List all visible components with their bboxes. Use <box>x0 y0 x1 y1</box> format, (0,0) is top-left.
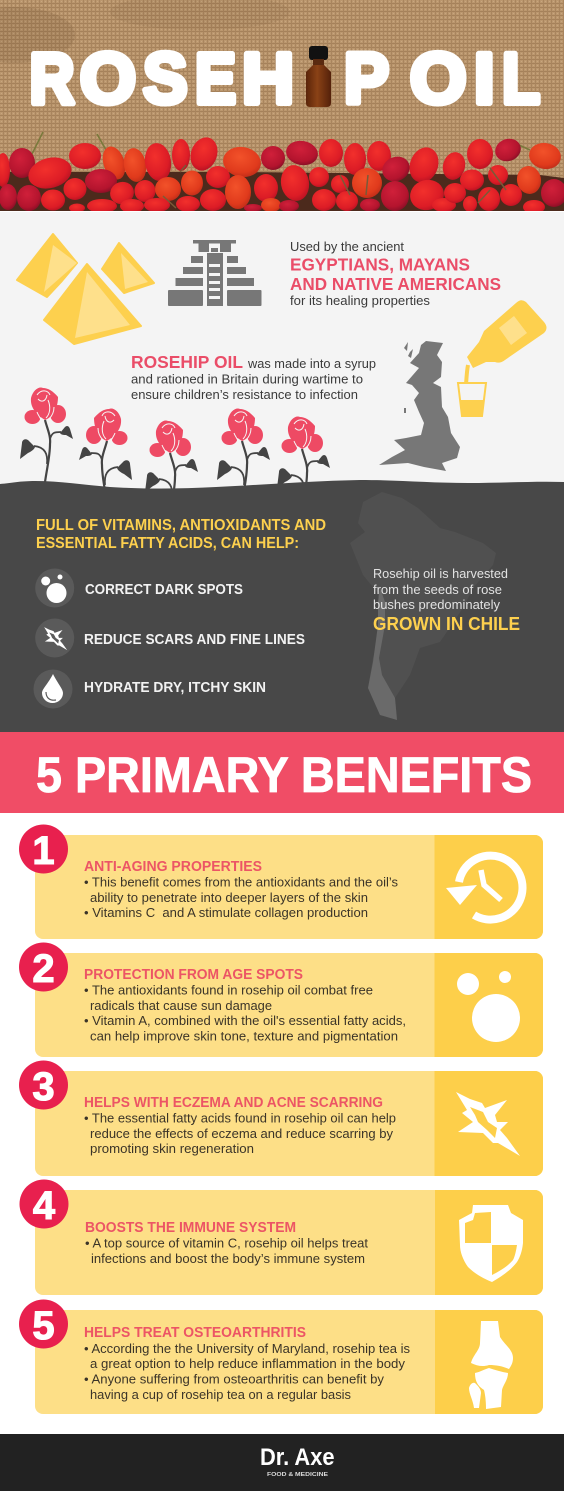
title: ROSEHIP OIL: H <box>242 40 294 119</box>
text block: grown in Chile <box>373 566 520 634</box>
text block: ancient cultures: EGYPTIANS, MAYANS <box>290 254 470 274</box>
rose 1 <box>20 387 73 482</box>
number badge 4 <box>20 1180 68 1228</box>
number badge 3 <box>19 1060 68 1110</box>
card 1 text: ability to penetrate into deeper layers of the skin <box>90 890 368 905</box>
rose 4 <box>217 408 270 503</box>
number badge 2 <box>19 942 68 992</box>
title: ROSEHIP OIL: O <box>80 40 136 119</box>
card 5 text <box>84 1325 411 1402</box>
card 4: immune system <box>20 1180 543 1295</box>
card 4 text: • A top source of vitamin C, rosehip oil helps treat <box>85 1236 368 1250</box>
title: ROSEHIP OIL: L <box>502 40 540 119</box>
footer bar with logo: Dr. Axe <box>260 1444 334 1471</box>
roses row <box>20 387 330 515</box>
number badge 5 <box>19 1300 68 1348</box>
text block: wartime Britain: ensure children’s resistance to infection <box>131 387 358 402</box>
card 3 text <box>84 1095 396 1156</box>
card 3 text: promoting skin regeneration <box>90 1141 254 1156</box>
card 4 text <box>85 1220 368 1266</box>
text block: grown in Chile: bushes predominately <box>373 597 500 612</box>
icon: spots <box>457 971 520 1042</box>
text block: ancient cultures: for its healing properties <box>290 293 430 308</box>
icon: mayan temple <box>168 240 262 306</box>
number badge 3: 3 <box>32 1065 55 1109</box>
heading: vitamins and antioxidants <box>36 517 326 552</box>
map: South America silhouette <box>350 492 496 720</box>
card 5 text: • Anyone suffering from osteoarthritis can benefit by <box>84 1372 384 1386</box>
map: United Kingdom <box>379 341 460 471</box>
number badge 5: 5 <box>32 1304 55 1348</box>
card 3 text: HELPS WITH ECZEMA AND ACNE SCARRING <box>84 1095 383 1111</box>
list item: correct dark spots: CORRECT DARK SPOTS <box>85 582 243 598</box>
list item: reduce scars: REDUCE SCARS AND FINE LINES <box>84 632 305 648</box>
text block: wartime Britain: was made into a syrup <box>247 356 376 371</box>
card 3: eczema and acne <box>19 1060 543 1176</box>
icon: pouring bottle and glass <box>458 300 546 416</box>
number badge 4: 4 <box>33 1184 56 1228</box>
title: ROSEHIP OIL: I <box>474 40 494 119</box>
card 2 text: • The antioxidants found in rosehip oil combat free <box>84 982 373 998</box>
icon: amber oil bottle as the letter I <box>306 46 331 107</box>
rose 3 <box>145 420 198 515</box>
number badge 2: 2 <box>32 947 55 991</box>
card 2: age spots <box>19 942 543 1057</box>
number badge 1 <box>19 824 68 874</box>
list item: hydrate dry skin: HYDRATE DRY, ITCHY SKIN <box>84 680 266 696</box>
text block: grown in Chile: from the seeds of rose <box>373 582 502 597</box>
title: ROSEHIP OIL: O <box>410 40 466 119</box>
banner: 5 primary benefits: 5 PRIMARY BENEFITS <box>36 747 532 803</box>
white divider and light background panel <box>0 211 564 488</box>
title: ROSEHIP OIL: P <box>344 40 389 119</box>
card 2 text: can help improve skin tone, texture and pigmentation <box>90 1028 398 1044</box>
text block: ancient cultures: AND NATIVE AMERICANS <box>290 274 501 294</box>
card 1 text: • This benefit comes from the antioxidants and the oil’s <box>84 874 398 890</box>
dark ground panel <box>0 480 564 732</box>
text block: wartime Britain: ROSEHIP OIL <box>131 352 243 372</box>
number badge 1: 1 <box>32 829 55 873</box>
rosehip berries row <box>0 132 564 214</box>
card 3 text: reduce the effects of eczema and reduce scarring by <box>90 1126 393 1141</box>
footer bar with logo <box>0 1434 564 1491</box>
heading: vitamins and antioxidants: FULL OF VITAMINS, ANTIOXIDANTS AND <box>36 517 326 534</box>
card 5: osteoarthritis <box>19 1300 543 1414</box>
card 4 text: BOOSTS THE IMMUNE SYSTEM <box>85 1220 296 1236</box>
text block: grown in Chile: Rosehip oil is harvested <box>373 566 508 581</box>
text block: wartime Britain: and rationed in Britain during wartime to <box>131 372 363 386</box>
list item: correct dark spots <box>35 568 243 608</box>
title: ROSEHIP OIL <box>30 40 540 119</box>
heading: vitamins and antioxidants: ESSENTIAL FATTY ACIDS, CAN HELP: <box>36 535 299 552</box>
text block: ancient cultures: Used by the ancient <box>290 239 404 254</box>
banner: 5 primary benefits <box>0 732 564 813</box>
card 5 text: a great option to help reduce inflammation in the body <box>90 1356 405 1371</box>
card 4 text: infections and boost the body’s immune system <box>91 1251 365 1266</box>
icon: shield <box>459 1205 523 1282</box>
card 2 text: radicals that cause sun damage <box>90 998 272 1013</box>
icon: scar burst <box>456 1092 520 1156</box>
card 5 text: • According the the University of Maryland, rosehip tea is <box>84 1341 411 1356</box>
text block: wartime Britain <box>131 352 376 402</box>
card 2 text: • Vitamin A, combined with the oil's essential fatty acids, <box>84 1013 406 1028</box>
title: ROSEHIP OIL: S <box>143 40 188 119</box>
list item: hydrate dry skin <box>34 670 266 708</box>
text block: grown in Chile: GROWN IN CHILE <box>373 614 520 634</box>
rose 5 <box>277 416 330 511</box>
card 1 text: ANTI-AGING PROPERTIES <box>84 859 262 875</box>
list item: reduce scars <box>35 618 305 658</box>
card 5 text: having a cup of rosehip tea on a regular basis <box>90 1387 351 1402</box>
text block: ancient cultures <box>290 239 501 308</box>
footer bar with logo: FOOD & MEDICINE <box>267 1472 328 1478</box>
card 2 text: PROTECTION FROM AGE SPOTS <box>84 967 303 983</box>
card 3 text: • The essential fatty acids found in rosehip oil can help <box>84 1110 396 1126</box>
rose 2 <box>79 408 132 503</box>
title: ROSEHIP OIL: R <box>30 40 74 119</box>
icon: egyptian pyramids <box>17 234 154 344</box>
benefit panel background <box>0 813 564 1435</box>
card 5 text: HELPS TREAT OSTEOARTHRITIS <box>84 1325 306 1341</box>
icon: knee joint <box>469 1321 513 1409</box>
card 1: anti-aging <box>19 824 543 939</box>
card 1 text: • Vitamins C and A stimulate collagen production <box>84 905 368 920</box>
card 2 text <box>84 967 406 1044</box>
icon: clock with back arrow <box>446 856 523 920</box>
header: burlap background <box>0 0 564 178</box>
card 1 text <box>84 859 398 920</box>
title: ROSEHIP OIL: E <box>195 40 236 119</box>
